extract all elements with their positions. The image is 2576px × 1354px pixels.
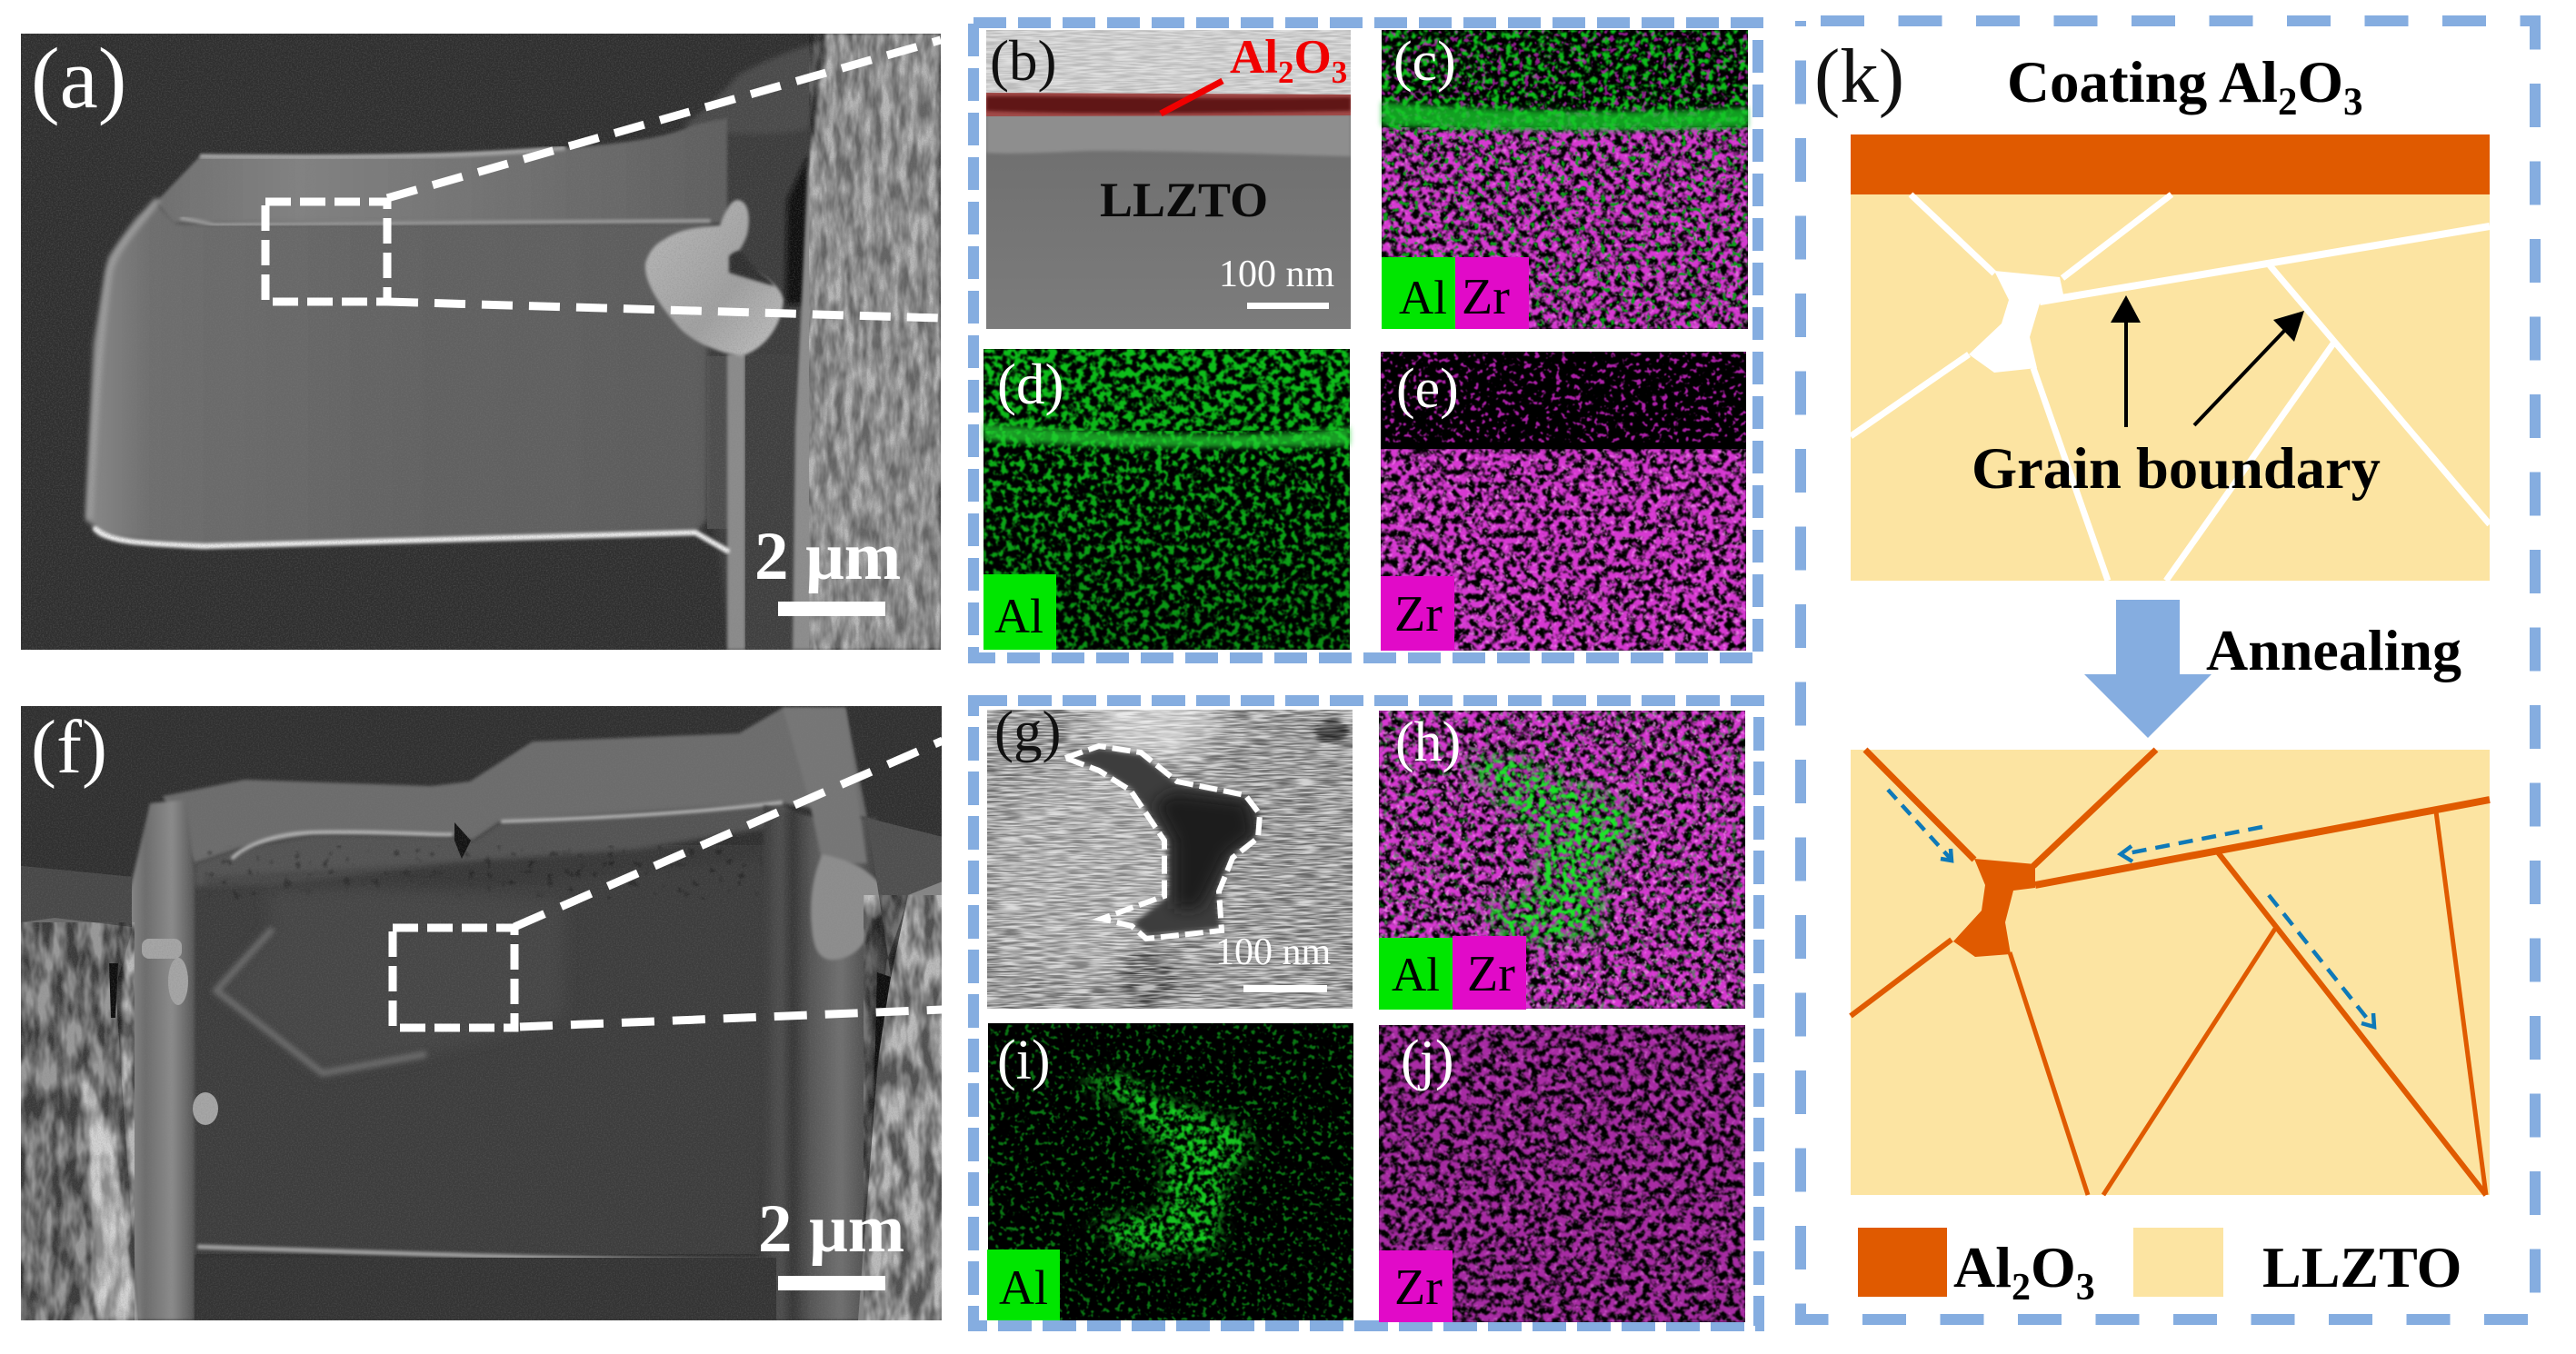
legend: Al2O3: Al xyxy=(1953,1235,2012,1299)
diagram: before annealing xyxy=(1851,134,2490,581)
legend Al Zr xyxy=(1382,257,1529,329)
right rough substrate xyxy=(858,818,943,1320)
scale label and bar: 100 nm xyxy=(1219,254,1334,295)
lamella top band xyxy=(156,118,727,223)
legend: LLZTO: LLZTO xyxy=(2262,1235,2461,1299)
lamella body xyxy=(87,202,718,547)
dashed frame: panels b to e xyxy=(973,23,1758,658)
legend Zr xyxy=(1381,576,1454,651)
legend Zr: Zr xyxy=(1394,586,1443,642)
scale label and bar: 2 μm xyxy=(758,1191,904,1267)
Al enrichment patch xyxy=(988,1023,1353,1320)
heading: coating: 2 xyxy=(2278,81,2297,124)
red arrow xyxy=(1161,81,1223,114)
dashed frame xyxy=(1801,21,2535,1319)
lamella top cap xyxy=(163,708,867,863)
textured substrate xyxy=(793,34,941,650)
dashed zoom box and guide lines xyxy=(265,40,941,318)
legend: Al2O3: 2 xyxy=(2012,1267,2031,1309)
panel (e): Zr map xyxy=(1381,352,1746,651)
legend: LLZTO xyxy=(2133,1228,2461,1299)
panel (k): schematic of coating and annealing xyxy=(1801,21,2535,1319)
label (d): (d) xyxy=(997,353,1063,416)
Al band xyxy=(983,423,1350,447)
flake on lamella xyxy=(216,886,564,1073)
speckled dark band under cap xyxy=(205,845,745,900)
panel (b): TEM cross-section with Al2O3 layer xyxy=(986,29,1351,329)
panel (a): SEM image of coated lamella xyxy=(21,30,941,650)
dark void xyxy=(1069,748,1258,936)
panel (j): Zr map xyxy=(1379,1025,1745,1322)
arrow: diagonal pointer xyxy=(2194,311,2304,425)
scale label and bar: 2 μm xyxy=(754,519,901,594)
legend: Al2O3: O xyxy=(2031,1235,2076,1299)
slit left xyxy=(109,963,118,1018)
Al2O3 label: Al xyxy=(1230,31,1278,84)
left rough substrate xyxy=(21,866,138,1320)
Al band xyxy=(1382,102,1748,131)
crack xyxy=(454,822,471,859)
heading: coating: 3 xyxy=(2343,81,2363,124)
Al2O3 coating layer xyxy=(1851,134,2490,194)
right wall behind lamella xyxy=(685,41,824,650)
bright cap edge xyxy=(232,802,783,859)
legend Al xyxy=(983,574,1056,650)
label (i): (i) xyxy=(997,1030,1051,1091)
legend Al Zr: Zr xyxy=(1467,946,1515,1002)
legend Al: Al xyxy=(999,1260,1048,1315)
legend: Al2O3 xyxy=(1858,1228,2095,1309)
white grain boundaries and void xyxy=(1851,194,2490,581)
legend: Al2O3: 3 xyxy=(2076,1267,2095,1309)
panel (f): SEM image of annealed lamella xyxy=(21,705,943,1320)
arrow: vertical pointer xyxy=(2111,295,2141,427)
panel (c): Al and Zr overlay map xyxy=(1382,30,1748,329)
grain boundary label: Grain boundary xyxy=(1972,436,2381,501)
lower bright edge xyxy=(197,1247,774,1279)
annealing arrow xyxy=(2084,600,2212,738)
panel (h): Al and Zr overlay map xyxy=(1379,711,1745,1010)
label (c): (c) xyxy=(1393,31,1456,93)
legend Zr: Zr xyxy=(1394,1259,1443,1316)
lamella face xyxy=(186,845,768,1254)
scale label and bar xyxy=(1215,931,1331,992)
LLZTO label: LLZTO xyxy=(1100,173,1268,227)
orange Al2O3 filled boundaries xyxy=(1851,750,2490,1195)
lighter subsurface band xyxy=(986,114,1351,156)
panel (d): Al map xyxy=(983,349,1350,650)
label (h): (h) xyxy=(1395,712,1461,773)
legend Al Zr xyxy=(1379,936,1526,1010)
dashed frame: panels g to j xyxy=(973,701,1759,1326)
left pillar xyxy=(119,800,195,1320)
scale label and bar xyxy=(757,533,900,616)
legend Zr xyxy=(1379,1250,1453,1322)
heading: coating: O xyxy=(2297,50,2343,115)
legend Al Zr: Al xyxy=(1399,272,1447,324)
legend Al Zr: Al xyxy=(1392,949,1440,1001)
Al2O3 label: 2 xyxy=(1278,55,1294,90)
heading: coating: Coating Al xyxy=(2007,50,2278,115)
label (f): (f) xyxy=(31,705,107,790)
Al enrichment patch xyxy=(1379,711,1745,1009)
lamella bright edges xyxy=(89,148,727,551)
label (j): (j) xyxy=(1401,1030,1454,1091)
right pillar xyxy=(756,805,877,1320)
red Al2O3 band xyxy=(986,93,1351,116)
legend Al Zr: Zr xyxy=(1462,269,1510,325)
panel (i): Al map xyxy=(987,1023,1353,1320)
Al2O3 label: 3 xyxy=(1332,55,1347,90)
legend Al xyxy=(987,1249,1060,1320)
dashed void outline xyxy=(1065,746,1260,939)
label (a): (a) xyxy=(31,30,126,126)
annealing label: Annealing xyxy=(2206,618,2461,682)
label (k): (k) xyxy=(1814,34,1904,119)
dashed zoom box and guide lines xyxy=(393,741,943,1028)
particle on lamella xyxy=(645,200,784,356)
blue diffusion arrows xyxy=(1888,790,2374,1027)
label (e): (e) xyxy=(1396,358,1459,420)
panel (g): TEM image of grain boundary void xyxy=(986,672,1353,1009)
legend Al: Al xyxy=(994,589,1043,643)
diagram: after annealing xyxy=(1851,750,2490,1195)
label (g): (g) xyxy=(994,700,1061,763)
label (b): (b) xyxy=(990,29,1056,93)
Al2O3 label: O xyxy=(1294,31,1332,84)
scale label and bar: 100 nm xyxy=(1215,931,1331,973)
